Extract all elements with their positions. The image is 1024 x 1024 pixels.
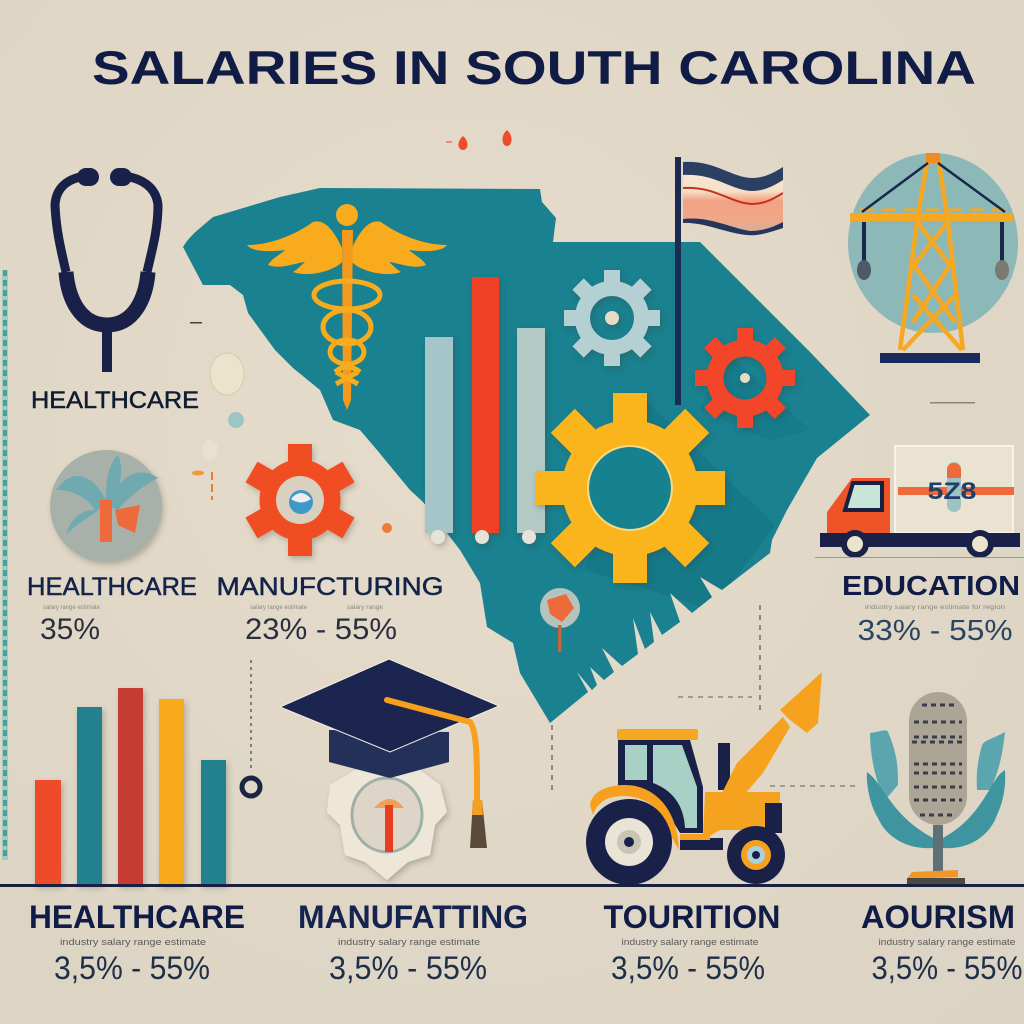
label: tourition: 3,5% - 55% [611, 950, 765, 986]
value: 33% - 55%: 33% - 55% [858, 615, 1012, 647]
title: SALARIES IN SOUTH CAROLINA [92, 42, 976, 95]
map of South Carolina [170, 180, 880, 730]
dashed connectors [552, 605, 858, 795]
baseline [0, 884, 1024, 887]
label: aourism: industry salary range estimate [878, 937, 1016, 947]
value: 35%: 35% [40, 613, 100, 646]
label: tourition: TOURITION [604, 899, 780, 935]
icon: delivery truck: 5Z8 [928, 478, 976, 505]
heading: healthcare 2: HEALTHCARE [27, 573, 197, 601]
sublabels middle row: salary range estimate [43, 605, 101, 611]
icon: crane tower [848, 153, 1018, 363]
label: manufatting: MANUFATTING [298, 899, 528, 935]
small map pins at the top [446, 130, 512, 150]
icon: red gear [695, 328, 795, 428]
flag [675, 155, 790, 405]
label: healthcare: 3,5% - 55% [54, 950, 210, 986]
sublabels middle row: salary range estimate [250, 605, 308, 611]
decorative left edge strip [2, 270, 8, 860]
heading: education: EDUCATION [842, 570, 1020, 601]
heading: healthcare 1: HEALTHCARE [31, 387, 199, 414]
label: tourition [604, 899, 780, 986]
bottom bar chart [35, 688, 226, 885]
icon: grey gear [564, 270, 660, 366]
icon: large yellow gear [535, 393, 725, 583]
connector with node [242, 660, 260, 796]
icon: delivery truck [815, 446, 1024, 558]
label: healthcare [29, 899, 245, 986]
icon: tractor excavator [586, 672, 822, 885]
label: tourition: industry salary range estimate [622, 937, 758, 947]
label: manufatting: 3,5% - 55% [329, 950, 487, 986]
label: aourism [861, 899, 1022, 986]
label: healthcare: industry salary range estimate [60, 937, 206, 947]
sublabels middle row [43, 605, 1005, 611]
label: aourism: AOURISM [861, 899, 1015, 935]
icon: stethoscope [55, 168, 158, 372]
label: manufatting: industry salary range estimate [338, 937, 480, 947]
small decorative marks beside map [190, 322, 975, 533]
small flower marker [540, 588, 580, 652]
icon: palm tree circle [50, 450, 162, 562]
heading: manufacturing: MANUFCTURING [216, 573, 444, 601]
label: healthcare: HEALTHCARE [29, 899, 245, 935]
icon: orange gear [246, 444, 354, 556]
sublabels middle row: industry salary range estimate for region [865, 605, 1005, 611]
sublabels middle row: salary range [347, 605, 384, 611]
label: manufatting [298, 899, 528, 986]
icon: microphone with leaves [867, 692, 1005, 885]
icon: graduation cap [280, 659, 499, 880]
value: 23% - 55%: 23% - 55% [245, 613, 397, 646]
icon: caduceus [247, 204, 447, 410]
bar chart on map [425, 277, 545, 544]
